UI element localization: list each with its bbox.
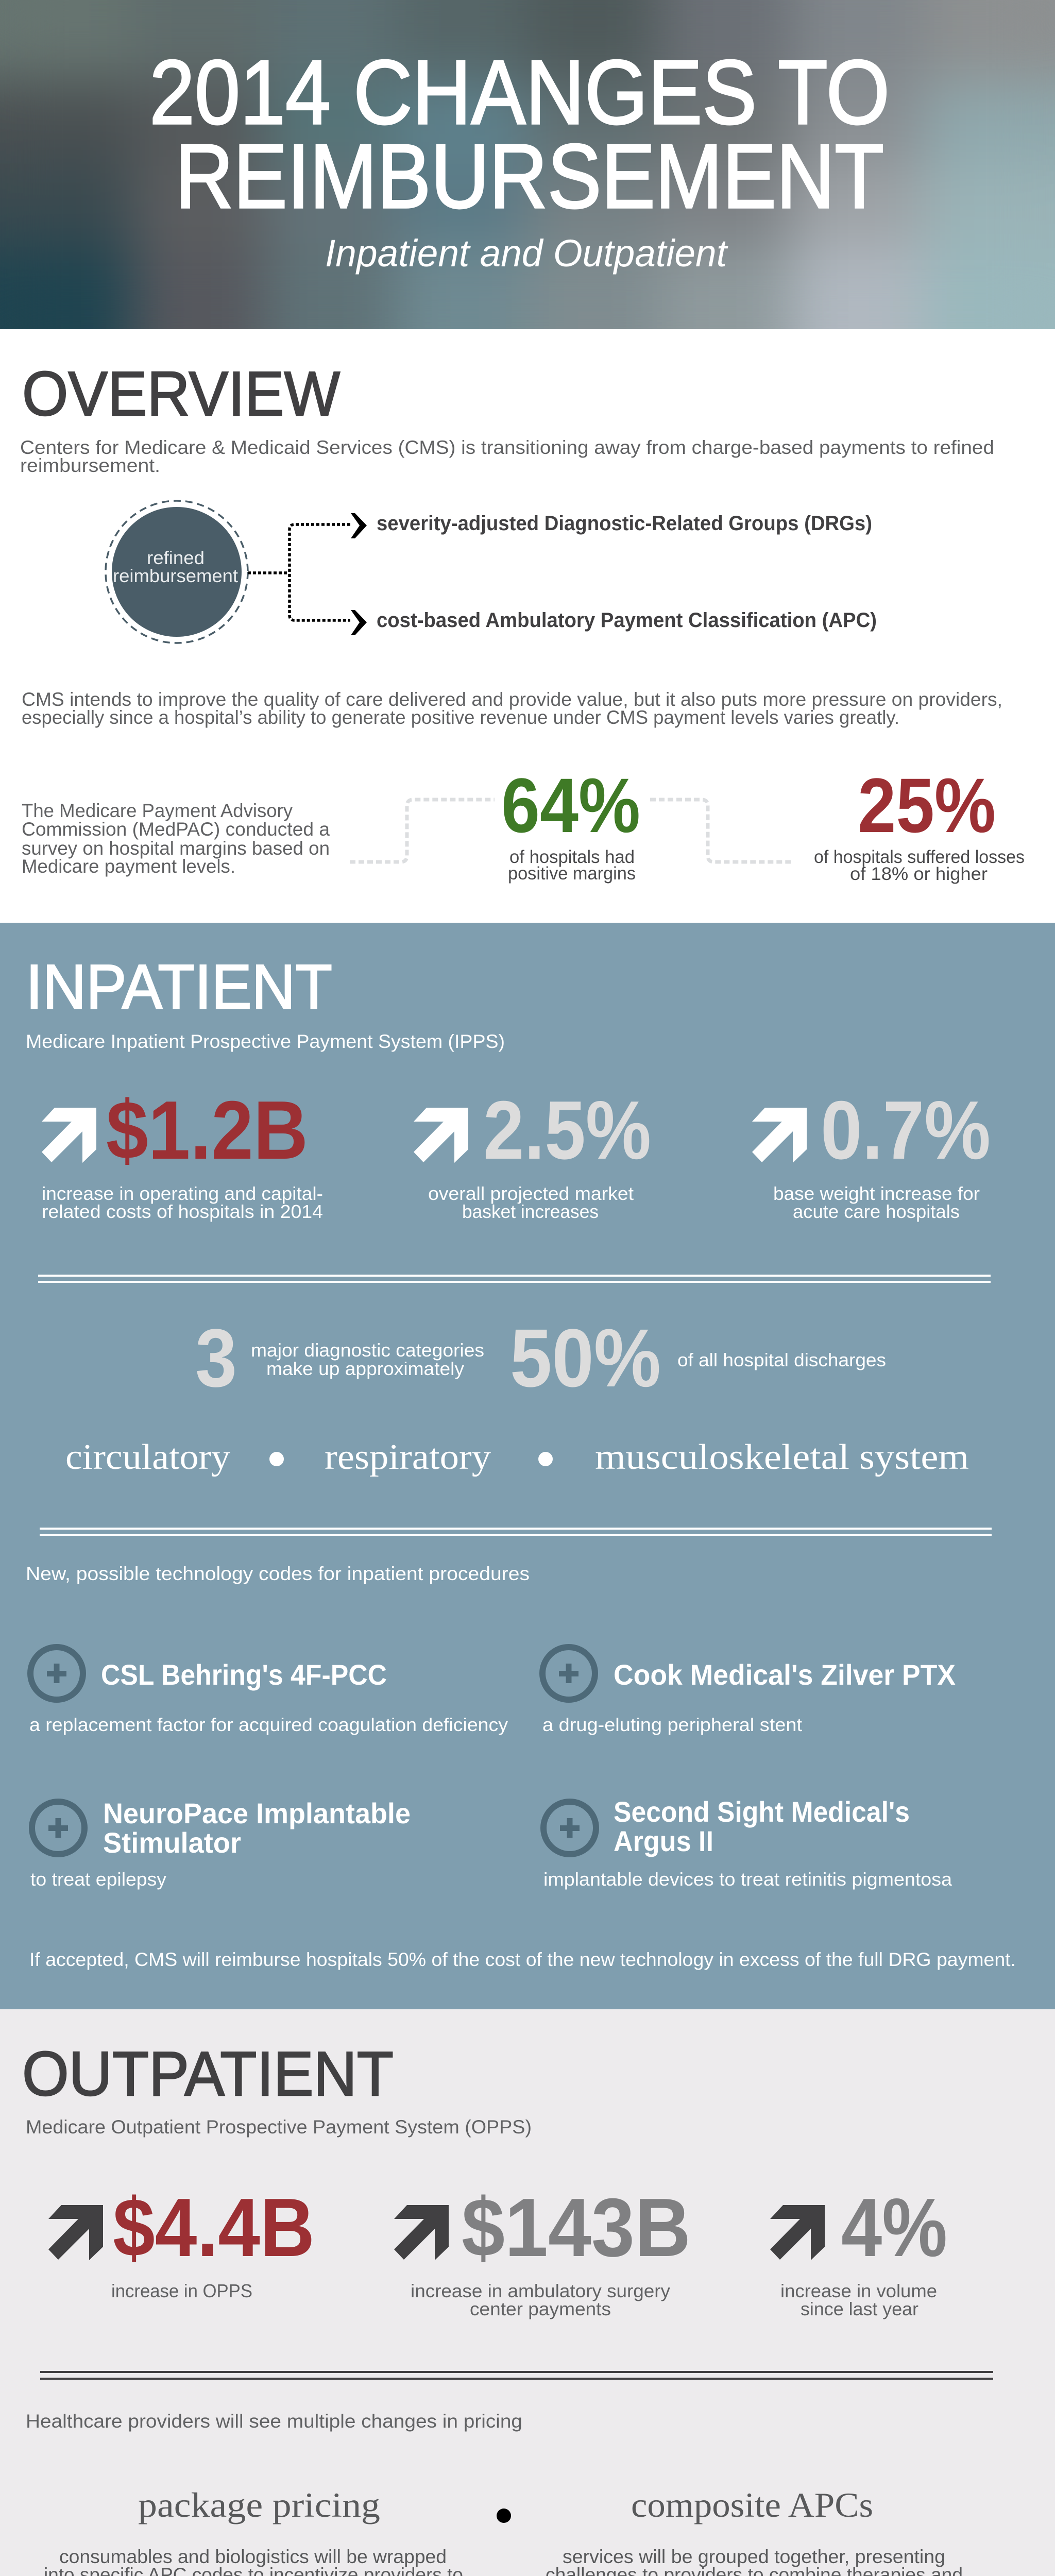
stat: 64%: positive margins <box>508 863 636 884</box>
caption: overall projected market <box>428 1183 634 1204</box>
caption <box>428 1183 634 1222</box>
text: CMS paragraph: CMS intends to improve the quality of care delivered and provide value, but it also puts more pressure on providers, <box>22 689 1002 710</box>
item: NeuroPace: NeuroPace Implantable <box>103 1797 411 1829</box>
column: package pricing: package pricing <box>138 2485 380 2524</box>
item: Cook Medical: a drug-eluting peripheral stent <box>542 1714 802 1735</box>
text: intro paragraph <box>20 437 994 476</box>
item: NeuroPace: to treat epilepsy <box>30 1869 166 1890</box>
icon: up arrow <box>414 1108 468 1163</box>
item: CSL Behring <box>29 1647 508 1735</box>
icon: up arrow <box>42 1108 96 1163</box>
heading: inpatient: INPATIENT <box>26 952 332 1022</box>
panel: outpatient <box>0 2009 1055 2576</box>
stat: 64%: of hospitals had <box>509 847 635 867</box>
stat: 3 categories 50% of discharges: make up approximately <box>266 1358 464 1379</box>
stat: 25%: of hospitals suffered losses <box>814 847 1025 867</box>
list: diagnostic categories <box>65 1437 969 1477</box>
text: CMS paragraph <box>22 689 1002 728</box>
stat: 3 categories 50% of discharges: major diagnostic categories <box>251 1340 484 1361</box>
subtitle: Inpatient and Outpatient <box>325 232 728 275</box>
text: MedPAC paragraph: The Medicare Payment Advisory <box>22 800 293 821</box>
caption: increase in operating and capital- <box>42 1183 323 1204</box>
stat: 3 categories 50% of discharges: of all hospital discharges <box>677 1349 886 1370</box>
text: reimbursement note: If accepted, CMS will reimburse hospitals 50% of the cost of the new technology in excess of the full DRG payment. <box>29 1949 1016 1970</box>
node: refined reimbursement circle <box>106 501 248 643</box>
text: IPPS subtitle: Medicare Inpatient Prospective Payment System (IPPS) <box>26 1031 505 1052</box>
bullet separator <box>497 2509 511 2523</box>
item: NeuroPace <box>30 1797 411 1890</box>
column: composite APCs: services will be grouped together, presenting <box>563 2546 945 2567</box>
caption <box>780 2280 937 2319</box>
item: Cook Medical: Cook Medical's Zilver PTX <box>614 1658 956 1691</box>
heading: outpatient: OUTPATIENT <box>22 2039 394 2109</box>
column: composite APCs: composite APCs <box>631 2485 873 2524</box>
caption <box>773 1183 980 1222</box>
stat: 3 categories 50% of discharges <box>195 1312 886 1404</box>
inpatient background <box>0 923 1055 2009</box>
text: technology codes intro: New, possible technology codes for inpatient procedures <box>26 1563 530 1584</box>
column: package pricing <box>44 2485 463 2576</box>
heading: overview: OVERVIEW <box>22 359 340 429</box>
node: refined reimbursement circle: reimbursement <box>113 565 238 586</box>
caption: increase in ambulatory surgery <box>411 2280 670 2301</box>
text: MedPAC paragraph: Commission (MedPAC) conducted a <box>22 819 330 840</box>
value: $4.4B <box>113 2181 315 2274</box>
label: APC: cost-based Ambulatory Payment Classification (APC) <box>377 609 877 632</box>
text: MedPAC paragraph <box>22 800 330 877</box>
value: 4% <box>841 2181 947 2274</box>
item: Cook Medical <box>542 1647 956 1735</box>
stat: 25% <box>814 762 1025 884</box>
icon: plus circle <box>32 1802 84 1854</box>
icon: plus circle <box>542 1647 595 1700</box>
value: 0.7% <box>821 1084 991 1177</box>
item: Second Sight <box>543 1795 952 1890</box>
icon: up arrow <box>394 2205 449 2260</box>
text: OPPS subtitle: Medicare Outpatient Prospective Payment System (OPPS) <box>26 2116 532 2138</box>
text: MedPAC paragraph: Medicare payment levels. <box>22 856 235 877</box>
stat: 3 categories 50% of discharges: 3 <box>195 1312 237 1404</box>
caption: base weight increase for <box>773 1183 980 1204</box>
stat: 4% <box>770 2181 947 2319</box>
caption: since last year <box>801 2298 918 2319</box>
connector: dotted branch <box>248 524 350 620</box>
column: composite APCs <box>546 2485 963 2576</box>
list: diagnostic categories: respiratory <box>325 1437 491 1477</box>
column: package pricing: consumables and biologistics will be wrapped <box>59 2546 447 2567</box>
connector: grey dotted path <box>350 800 794 862</box>
text: MedPAC paragraph: survey on hospital margins based on <box>22 838 330 859</box>
item: CSL Behring: a replacement factor for acquired coagulation deficiency <box>29 1714 508 1735</box>
item: CSL Behring: CSL Behring's 4F-PCC <box>101 1658 387 1691</box>
text: pricing intro: Healthcare providers will see multiple changes in pricing <box>26 2411 522 2432</box>
caption <box>42 1183 323 1222</box>
caption: acute care hospitals <box>793 1201 960 1222</box>
panel: overview <box>20 359 1025 884</box>
caption <box>411 2280 670 2319</box>
icon: up arrow <box>770 2205 825 2260</box>
stat: 25%: of 18% or higher <box>850 864 988 884</box>
title <box>149 41 890 227</box>
stat: 2.5% <box>414 1084 651 1222</box>
panel: inpatient <box>0 923 1055 2009</box>
text: intro paragraph: Centers for Medicare & Medicaid Services (CMS) is transitioning away from charge-based payments to refined <box>20 437 994 458</box>
list: diagnostic categories: circulatory <box>65 1437 230 1477</box>
caption: related costs of hospitals in 2014 <box>42 1201 323 1222</box>
value: $1.2B <box>106 1084 308 1177</box>
node: refined reimbursement circle: refined <box>147 547 205 568</box>
icon: plus circle <box>543 1802 596 1854</box>
stat: 64%: 64% <box>501 762 640 849</box>
caption: center payments <box>470 2298 611 2319</box>
arrow: bottom chevron <box>351 610 367 635</box>
stat: 0.7% <box>752 1084 991 1222</box>
icon: up arrow <box>48 2205 103 2260</box>
stat: $4.4B <box>48 2181 315 2301</box>
stat: 25%: 25% <box>858 762 996 849</box>
title: 2014 CHANGES TO <box>149 41 890 143</box>
item: Second Sight: Argus II <box>614 1825 713 1857</box>
stat: $1.2B <box>42 1084 323 1222</box>
item: NeuroPace: Stimulator <box>103 1826 241 1859</box>
outpatient background <box>0 2009 1055 2576</box>
text: CMS paragraph: especially since a hospital’s ability to generate positive revenue under CMS payment levels varies greatly. <box>22 707 899 728</box>
item: Second Sight: implantable devices to treat retinitis pigmentosa <box>543 1869 952 1890</box>
icon: up arrow <box>752 1108 807 1163</box>
caption: basket increases <box>462 1201 599 1222</box>
diagram: refined reimbursement <box>106 501 877 643</box>
item: Second Sight: Second Sight Medical's <box>614 1795 910 1828</box>
list: diagnostic categories: musculoskeletal system <box>595 1437 969 1477</box>
stat: 64% <box>501 762 640 884</box>
caption: increase in volume <box>780 2280 937 2301</box>
title: REIMBURSEMENT <box>175 125 884 227</box>
label: DRGs: severity-adjusted Diagnostic-Related Groups (DRGs) <box>377 512 872 535</box>
stat: 3 categories 50% of discharges: 50% <box>510 1312 661 1404</box>
value: $143B <box>462 2181 691 2274</box>
value: 2.5% <box>483 1084 651 1177</box>
caption: increase in OPPS <box>111 2280 252 2301</box>
arrow: top chevron <box>351 513 367 538</box>
hero blurred photo background <box>0 0 1055 329</box>
icon: plus circle <box>30 1647 83 1700</box>
panel: hero header <box>0 0 1055 329</box>
text: intro paragraph: reimbursement. <box>20 455 160 476</box>
stat: $143B <box>394 2181 691 2319</box>
